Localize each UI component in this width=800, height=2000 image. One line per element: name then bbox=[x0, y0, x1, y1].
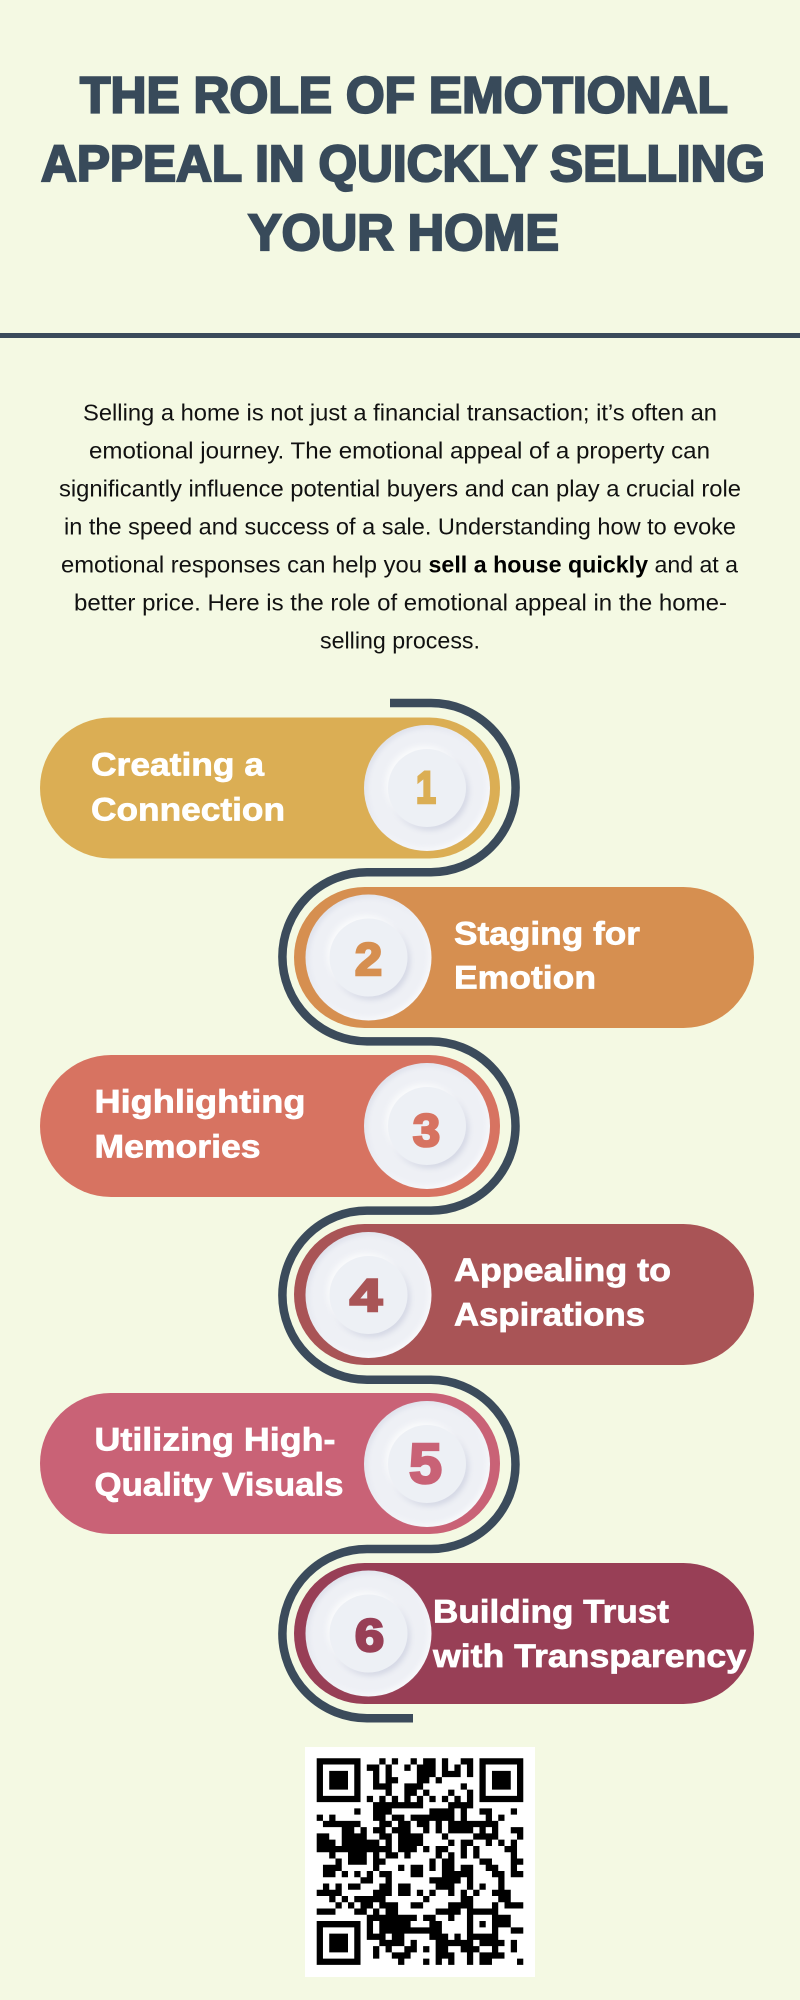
step 4: Appealing to Aspirations: 4 bbox=[350, 1270, 382, 1321]
step 1: Creating a Connection: 1 bbox=[416, 762, 436, 813]
step 2: Staging for Emotion: 2 bbox=[355, 934, 382, 985]
intro paragraph: significantly influence potential buyers and can play a crucial role bbox=[59, 476, 741, 502]
step 6: Building Trust with Transparency: with Transparency bbox=[432, 1638, 746, 1674]
intro paragraph: better price. Here is the role of emotional appeal in the home- bbox=[74, 590, 727, 616]
step 6: Building Trust with Transparency: Building Trust bbox=[433, 1593, 669, 1629]
step 4: Appealing to Aspirations: Appealing to bbox=[454, 1252, 671, 1288]
intro paragraph: in the speed and success of a sale. Understanding how to evoke bbox=[64, 514, 736, 540]
title: YOUR HOME bbox=[248, 204, 559, 261]
step 2: Staging for Emotion: Emotion bbox=[454, 959, 596, 995]
step 3: Highlighting Memories: 3 bbox=[413, 1105, 440, 1156]
serpentine connector line bbox=[282, 703, 516, 1718]
title bbox=[41, 66, 765, 261]
intro paragraph: Selling a home is not just a financial transaction; it’s often an bbox=[83, 400, 717, 426]
step 1: Creating a Connection bbox=[40, 718, 500, 858]
title divider rule bbox=[0, 333, 800, 338]
step 1: Creating a Connection: Connection bbox=[91, 792, 285, 828]
intro paragraph: emotional journey. The emotional appeal of a property can bbox=[89, 438, 710, 464]
intro paragraph: emotional responses can help you bbox=[61, 552, 422, 578]
step 5: Utilizing High-Quality Visuals: Utilizing High- bbox=[94, 1422, 336, 1458]
step 4: Appealing to Aspirations bbox=[294, 1224, 754, 1365]
step 5: Utilizing High-Quality Visuals bbox=[40, 1393, 500, 1534]
step 2: Staging for Emotion bbox=[294, 887, 754, 1028]
step 5: Utilizing High-Quality Visuals: Quality Visuals bbox=[94, 1466, 344, 1502]
intro paragraph: and at a bbox=[654, 552, 738, 578]
title: APPEAL IN QUICKLY SELLING bbox=[41, 135, 765, 192]
step 6: Building Trust with Transparency: 6 bbox=[355, 1610, 384, 1661]
step 6: Building Trust with Transparency bbox=[294, 1563, 754, 1704]
intro paragraph bbox=[59, 400, 741, 654]
intro paragraph: sell a house quickly bbox=[428, 552, 648, 578]
step 5: Utilizing High-Quality Visuals: 5 bbox=[409, 1432, 442, 1496]
QR code bbox=[305, 1747, 535, 1977]
step 2: Staging for Emotion: Staging for bbox=[454, 915, 640, 951]
step 4: Appealing to Aspirations: Aspirations bbox=[454, 1296, 645, 1332]
step 3: Highlighting Memories bbox=[40, 1055, 500, 1197]
step 1: Creating a Connection: Creating a bbox=[91, 747, 264, 783]
step 3: Highlighting Memories: Highlighting bbox=[94, 1084, 306, 1120]
title: THE ROLE OF EMOTIONAL bbox=[80, 66, 728, 124]
intro paragraph: selling process. bbox=[320, 628, 480, 654]
step 3: Highlighting Memories: Memories bbox=[94, 1128, 260, 1164]
